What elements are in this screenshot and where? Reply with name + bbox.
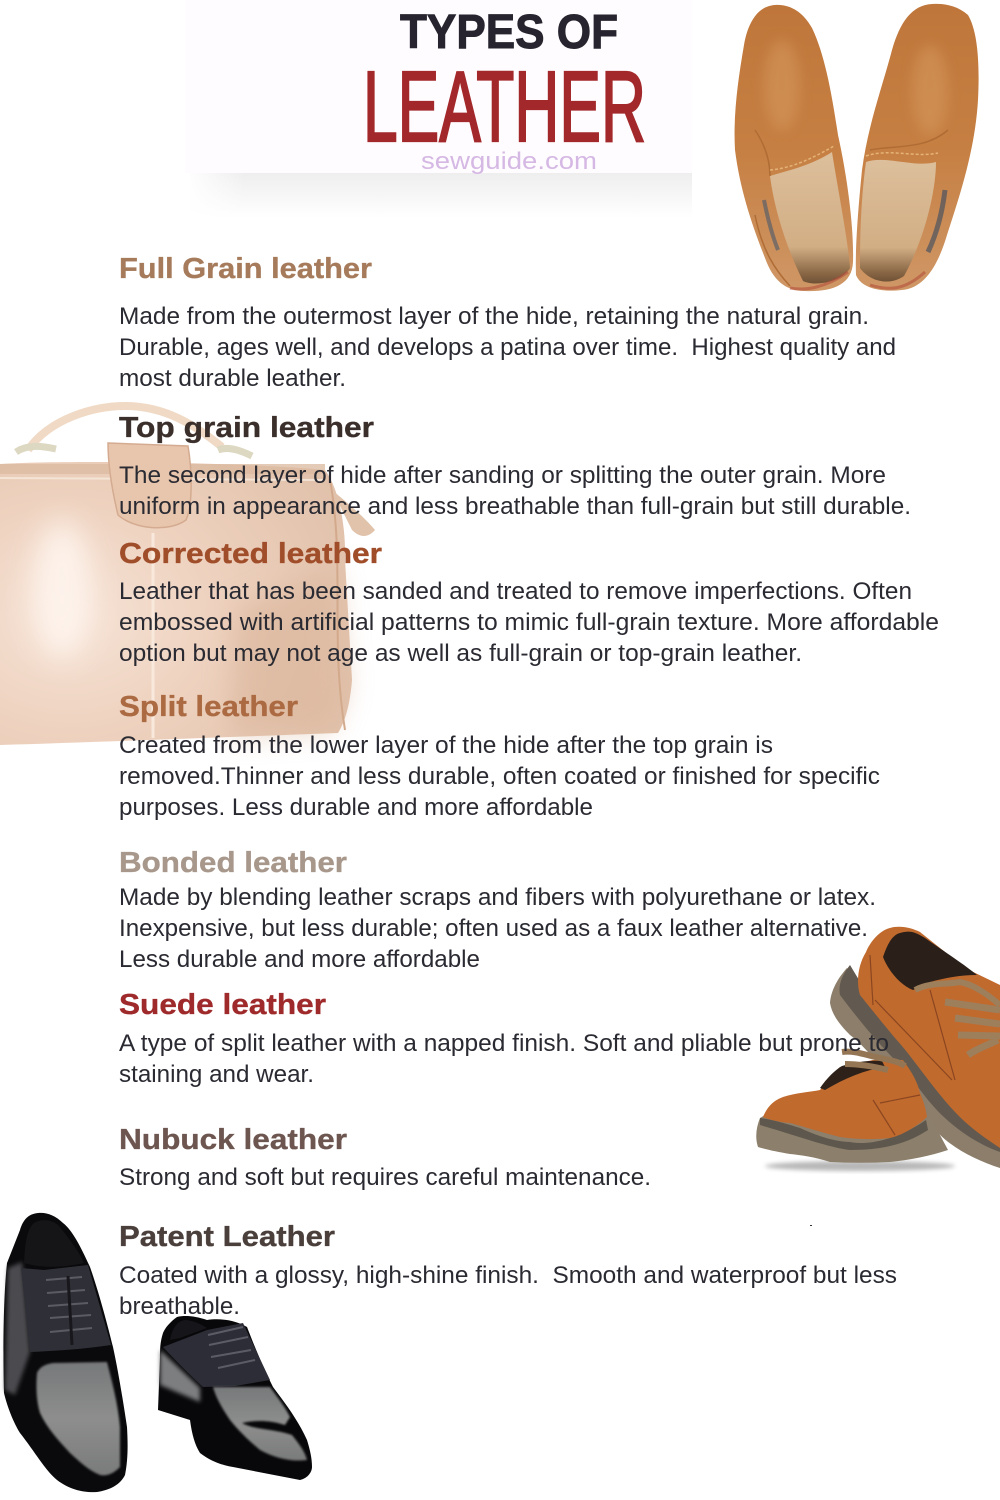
section: full grain leather: Full Grain leather (119, 253, 372, 285)
section: corrected leather (119, 538, 939, 667)
image: black patent leather shoes (3, 1213, 312, 1492)
decorative dot marker (810, 1225, 812, 1226)
title (363, 6, 646, 163)
section: bonded leather: Made by blending leather scraps and fibers with polyurethane or latex. (119, 884, 876, 911)
section: top grain leather (119, 412, 911, 520)
section: suede leather: Suede leather (119, 989, 326, 1021)
section: split leather: Created from the lower layer of the hide after the top grain is (119, 732, 773, 759)
title: LEATHER (363, 51, 646, 163)
section: patent leather: Patent Leather (119, 1221, 335, 1253)
section: patent leather (119, 1221, 897, 1320)
section: split leather: purposes. Less durable and more affordable (119, 794, 593, 821)
section: full grain leather: most durable leather. (119, 365, 346, 392)
section: top grain leather: The second layer of hide after sanding or splitting the outer grain. More (119, 462, 886, 489)
image: faded leather bag (0, 406, 375, 745)
section: bonded leather: Bonded leather (119, 847, 347, 879)
section: patent leather: Coated with a glossy, high-shine finish. Smooth and waterproof but less (119, 1262, 897, 1289)
website credit: sewguide.com (421, 148, 597, 175)
section: corrected leather: option but may not age as well as full-grain or top-grain leather. (119, 640, 802, 667)
title: TYPES OF (400, 6, 618, 59)
section: corrected leather: Leather that has been sanded and treated to remove imperfections. Often (119, 578, 912, 605)
section: suede leather (119, 989, 889, 1088)
image: orange nubuck boots (756, 927, 1000, 1171)
section: split leather: Split leather (119, 691, 298, 723)
section: full grain leather: Durable, ages well, and develops a patina over time. Highest quality and (119, 334, 896, 361)
section: bonded leather: Less durable and more affordable (119, 946, 480, 973)
image: tan loafers (735, 4, 979, 291)
section: split leather: removed.Thinner and less durable, often coated or finished for specific (119, 763, 880, 790)
section: nubuck leather: Nubuck leather (119, 1124, 347, 1156)
section: suede leather: staining and wear. (119, 1061, 314, 1088)
section: split leather (119, 691, 880, 821)
section: top grain leather: uniform in appearance and less breathable than full-grain but still durable. (119, 493, 911, 520)
section: full grain leather (119, 253, 896, 392)
section: full grain leather: Made from the outermost layer of the hide, retaining the natural grain. (119, 303, 869, 330)
section: nubuck leather (119, 1124, 651, 1191)
section: suede leather: A type of split leather with a napped finish. Soft and pliable but prone to (119, 1030, 889, 1057)
section: patent leather: breathable. (119, 1293, 240, 1320)
section: bonded leather: Inexpensive, but less durable; often used as a faux leather alternative. (119, 915, 868, 942)
section: corrected leather: embossed with artificial patterns to mimic full-grain texture. More affordable (119, 609, 939, 636)
section: nubuck leather: Strong and soft but requires careful maintenance. (119, 1164, 651, 1191)
section: corrected leather: Corrected leather (119, 538, 382, 570)
section: top grain leather: Top grain leather (119, 412, 374, 444)
panel: title background (185, 0, 692, 218)
section: bonded leather (119, 847, 876, 973)
